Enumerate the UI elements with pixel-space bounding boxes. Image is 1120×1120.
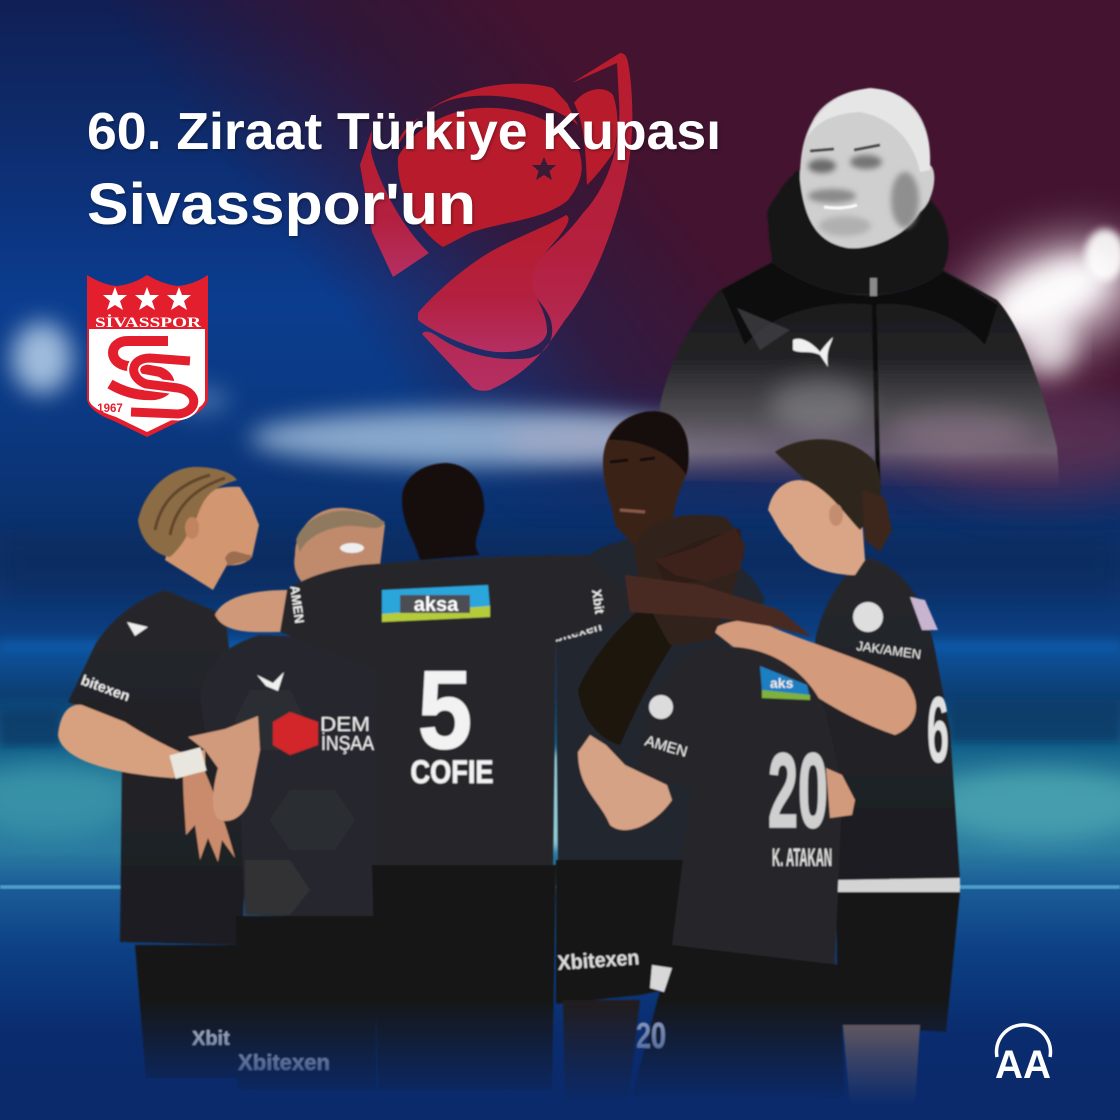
inner bowl [398, 108, 582, 247]
swoosh [422, 53, 632, 391]
jacket [660, 170, 1060, 490]
AA logo: AA [995, 1043, 1051, 1087]
player: left, blond hair [58, 467, 259, 1078]
title [87, 103, 721, 237]
player: left, blond hair: Xbit [192, 1028, 230, 1050]
player: number 20: 20 [768, 732, 828, 850]
league badge [853, 602, 883, 632]
player: number 20: K. ATAKAN [772, 844, 832, 872]
hood [769, 170, 949, 293]
player: number 20: 20 [636, 1015, 666, 1056]
player: center, Cofie 5: 5 [418, 649, 472, 772]
Sivasspor club crest: 1967 [97, 403, 123, 415]
player: right, number shirt [712, 439, 960, 1105]
player: second from left [188, 508, 385, 1090]
player: center, Cofie 5: AMEN [287, 584, 307, 624]
player: tall background player [552, 411, 765, 1105]
right wing [574, 89, 618, 185]
AA logo [995, 1025, 1051, 1087]
player: number 20: AMEN [643, 733, 689, 761]
star [532, 157, 556, 180]
player: center, Cofie 5: Xbit [589, 588, 607, 615]
left band [360, 130, 429, 277]
title: 60. Ziraat Türkiye Kupası [87, 103, 721, 161]
facial shading [808, 155, 919, 236]
player: second from left: Xbitexen [238, 1050, 330, 1075]
team players group [58, 411, 960, 1105]
player: left, blond hair: bitexen [79, 673, 132, 705]
sponsor: aksa badge [382, 585, 490, 622]
head [800, 89, 934, 248]
zipper [874, 296, 878, 480]
bottom fade [0, 1000, 1120, 1120]
sponsor: aksa badge: aksa [414, 594, 459, 616]
player: right, number shirt: JAK/AMEN [856, 638, 922, 662]
player: right, number shirt: 6 [927, 677, 949, 782]
player: number 20 [578, 515, 855, 1098]
player: center, Cofie 5 [215, 463, 812, 1090]
title: Sivasspor'un [87, 172, 476, 237]
player: tall background player: Xbitexen [557, 946, 640, 975]
player: center, Cofie 5: COFIE [410, 754, 494, 790]
mist over jacket [770, 377, 870, 433]
Sivasspor club crest: SİVASSPOR [95, 314, 201, 331]
sponsor: Demir İnşaat [273, 712, 375, 755]
lower body [418, 215, 569, 352]
sponsor: aksa badge [760, 666, 810, 700]
player: tall background player: bitexen [552, 618, 603, 645]
floodlights and mist [12, 219, 1120, 466]
Sivasspor club crest [87, 275, 208, 437]
sponsor: Demir İnşaat: DEM [320, 714, 370, 736]
cup logo [360, 53, 632, 391]
coach photo [660, 88, 1060, 490]
sponsor: aksa badge: aks [770, 675, 794, 691]
stands and pitch [0, 530, 1120, 889]
puma logo [793, 337, 833, 367]
sponsor: Demir İnşaat: İNŞAA [321, 732, 375, 755]
